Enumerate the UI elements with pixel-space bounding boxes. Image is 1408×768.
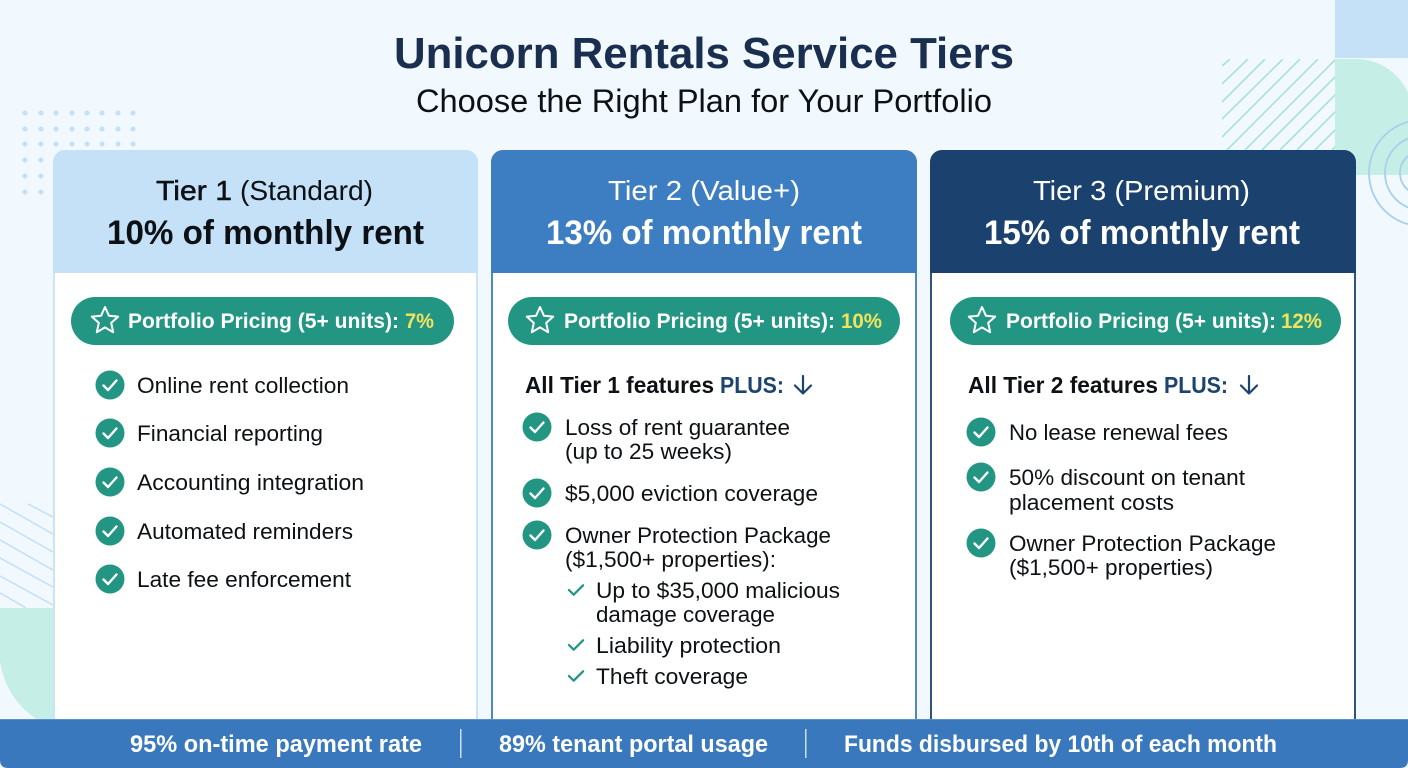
tier 3 portfolio pricing pill: Portfolio Pricing (5+ units):: [1006, 310, 1276, 333]
tier 2 header: 13% of monthly rent: [546, 214, 862, 252]
tier 3 header: Tier 3 (Premium): [1033, 175, 1250, 206]
tier 3 plus heading: All Tier 2 features: [968, 372, 1158, 398]
stat: tenant portal usage: 89% tenant portal usage: [499, 731, 768, 758]
tier 1 header: (Standard): [240, 175, 373, 206]
title: Unicorn Rentals Service Tiers: [394, 29, 1014, 78]
tier 1 portfolio pricing pill: Portfolio Pricing (5+ units):: [128, 310, 399, 333]
tier 2 feature list: Loss of rent guarantee: [565, 415, 790, 440]
tier 2 owner protection sub-list: Theft coverage: [596, 664, 748, 689]
tier 2 feature list: Owner Protection Package: [565, 523, 831, 548]
tier 1 feature list: Late fee enforcement: [137, 567, 351, 592]
decoration: dot grid: [22, 110, 136, 195]
tier 1 portfolio pricing pill: 7%: [405, 310, 434, 333]
panel: tier 1: [53, 150, 478, 731]
tier 1 feature list: Automated reminders: [137, 519, 353, 544]
tier 3 feature list: No lease renewal fees: [1009, 420, 1228, 445]
tier 3 plus heading: PLUS:: [1164, 372, 1228, 398]
tier 2 plus heading: All Tier 1 features: [525, 372, 714, 398]
footer stats bar: [0, 719, 1408, 768]
tier 2 portfolio pricing pill: 10%: [841, 310, 882, 333]
tier 1 header: Tier 1: [156, 175, 232, 206]
tier 2 feature list: ($1,500+ properties):: [565, 547, 776, 572]
subtitle: Choose the Right Plan for Your Portfolio: [416, 83, 992, 119]
panel: tier 3: [930, 150, 1356, 731]
tier 2 owner protection sub-list: Liability protection: [596, 633, 781, 658]
tier 2 owner protection sub-list: Up to $35,000 malicious: [596, 578, 840, 603]
tier 3 feature list: placement costs: [1009, 490, 1174, 515]
tier 2 owner protection sub-list: damage coverage: [596, 602, 775, 627]
tier 3 portfolio pricing pill: [950, 297, 1341, 345]
tier 1 header: 10% of monthly rent: [107, 214, 424, 252]
tier 1 feature list: Accounting integration: [137, 470, 364, 495]
tier 2 plus heading: [525, 372, 811, 398]
tier 1 header: [53, 150, 478, 273]
tier 3 feature list: 50% discount on tenant: [1009, 465, 1245, 490]
tier 1 portfolio pricing pill: [71, 297, 454, 345]
tier 2 owner protection sub-list: [569, 578, 840, 689]
tier 2 plus heading: PLUS:: [720, 372, 784, 398]
tier 2 header: Tier 2 (Value+): [608, 175, 800, 206]
tier 3 portfolio pricing pill: 12%: [1281, 310, 1322, 333]
tier 3 feature list: ($1,500+ properties): [1009, 555, 1213, 580]
tier 1 feature list: [96, 370, 364, 594]
tier 1 feature list: Financial reporting: [137, 421, 323, 446]
tier 3 feature list: Owner Protection Package: [1009, 531, 1276, 556]
tier 2 portfolio pricing pill: [508, 297, 900, 345]
tier 2 header: [491, 150, 917, 273]
tier 3 header: [930, 150, 1356, 273]
stat: on-time payment: 95% on-time payment rate: [130, 731, 422, 758]
tier 2 feature list: (up to 25 weeks): [565, 439, 732, 464]
tier 1 feature list: Online rent collection: [137, 373, 349, 398]
panel: tier 2: [491, 150, 917, 731]
tier 2 portfolio pricing pill: Portfolio Pricing (5+ units):: [564, 310, 835, 333]
decoration: top right shapes: [1222, 0, 1408, 226]
tier 3 plus heading: [968, 372, 1257, 398]
stat: funds disbursed: Funds disbursed by 10th of each month: [844, 731, 1277, 758]
tier 2 feature list: [522, 412, 840, 689]
tier 2 feature list: $5,000 eviction coverage: [565, 481, 818, 506]
tier 3 feature list: [966, 418, 1276, 580]
decoration: bottom left shapes: [0, 504, 53, 719]
tier 3 header: 15% of monthly rent: [984, 214, 1300, 252]
